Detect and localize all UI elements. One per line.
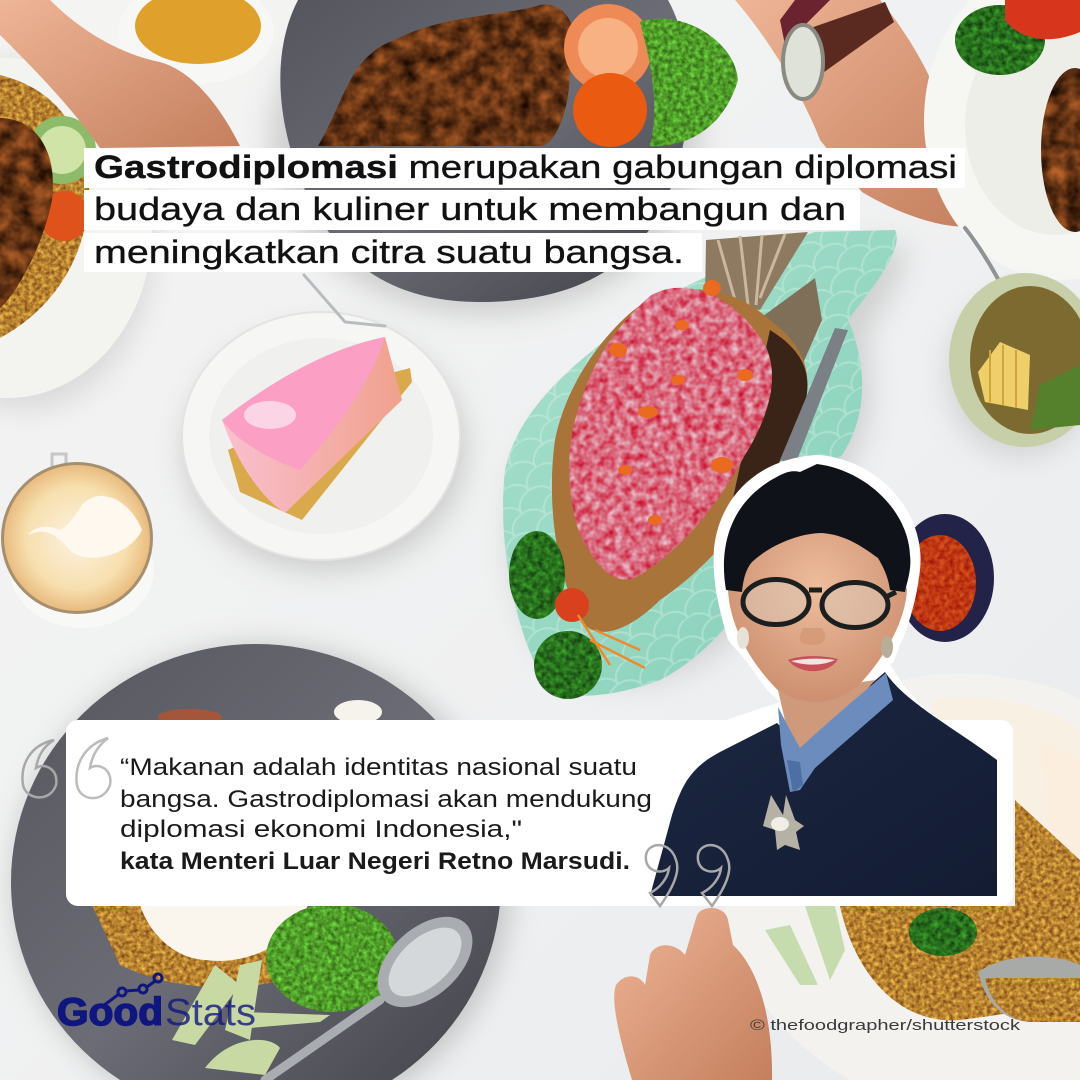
herbs and tomato — [509, 531, 565, 619]
white outline — [714, 455, 997, 896]
logo wordmark: Good — [57, 991, 163, 1034]
round black glasses — [743, 580, 896, 628]
green rice — [266, 904, 398, 1012]
nose — [800, 628, 825, 645]
cake — [222, 337, 402, 513]
logo network icon — [103, 974, 162, 1006]
black hair — [724, 464, 910, 592]
chilli flecks — [609, 280, 753, 525]
earrings — [737, 627, 749, 649]
GoodStats logo — [57, 974, 256, 1034]
headline — [84, 148, 965, 272]
cake board — [228, 368, 412, 520]
silver brooch — [763, 795, 804, 850]
fork — [304, 275, 385, 326]
quote text: bangsa. Gastrodiplomasi akan mendukung — [120, 786, 652, 813]
decorative closing quote marks — [646, 845, 729, 906]
patterned collar — [778, 673, 893, 792]
quote text: diplomasi ekonomi Indonesia," — [120, 816, 522, 843]
navy jacket — [650, 672, 997, 896]
collar lower fold — [787, 760, 803, 792]
spoon — [265, 1000, 380, 1080]
table spoon — [965, 228, 1080, 352]
plate: top-left with grilled chicken — [0, 58, 155, 410]
quote card — [66, 720, 1013, 906]
headline line 2: budaya dan kuliner untuk membangun dan — [94, 191, 846, 227]
opening quote mark — [76, 738, 110, 798]
topping — [569, 288, 772, 579]
tail fin — [705, 232, 822, 370]
fish plate — [503, 230, 907, 696]
GoodStats logo: Stats — [165, 992, 256, 1034]
plate: top-centre dark with roast chicken — [270, 0, 738, 315]
headline line 1: Gastrodiplomasi merupakan gabungan diplomasi — [94, 149, 957, 185]
quote text — [120, 754, 652, 875]
hand: top-left — [0, 0, 240, 148]
photo credit: © thefoodgrapher/shutterstock — [750, 1018, 1021, 1034]
headline line 3: meningkatkan citra suatu bangsa. — [94, 234, 684, 270]
quote text: kata Menteri Luar Negeri Retno Marsudi. — [120, 848, 630, 875]
bottom-right plate with fried rice — [725, 674, 1080, 1080]
latte glass — [1, 454, 154, 628]
bottom-left dark plate with rice — [11, 644, 510, 1080]
smile — [788, 656, 838, 671]
face — [728, 510, 907, 704]
fish with pink shallot topping — [509, 232, 848, 699]
bowl of vegetable soup — [946, 273, 1080, 457]
quote text: “Makanan adalah identitas nasional suatu — [120, 754, 637, 781]
fried egg — [140, 905, 308, 961]
small sambal bowl — [896, 514, 994, 642]
hand: bottom — [614, 908, 772, 1080]
hand with wristwatch: top-right — [735, 0, 980, 227]
soup bowl: top — [118, 0, 274, 84]
neck — [778, 680, 875, 770]
cucumber — [172, 960, 330, 1075]
food peeking above the card — [158, 709, 222, 725]
plate: top-right with greens — [924, 0, 1080, 280]
decorative opening quote mark (left part over the table) — [22, 740, 56, 797]
plate with cake slice — [182, 312, 467, 572]
portrait of minister with white cut-out outline — [650, 455, 997, 896]
